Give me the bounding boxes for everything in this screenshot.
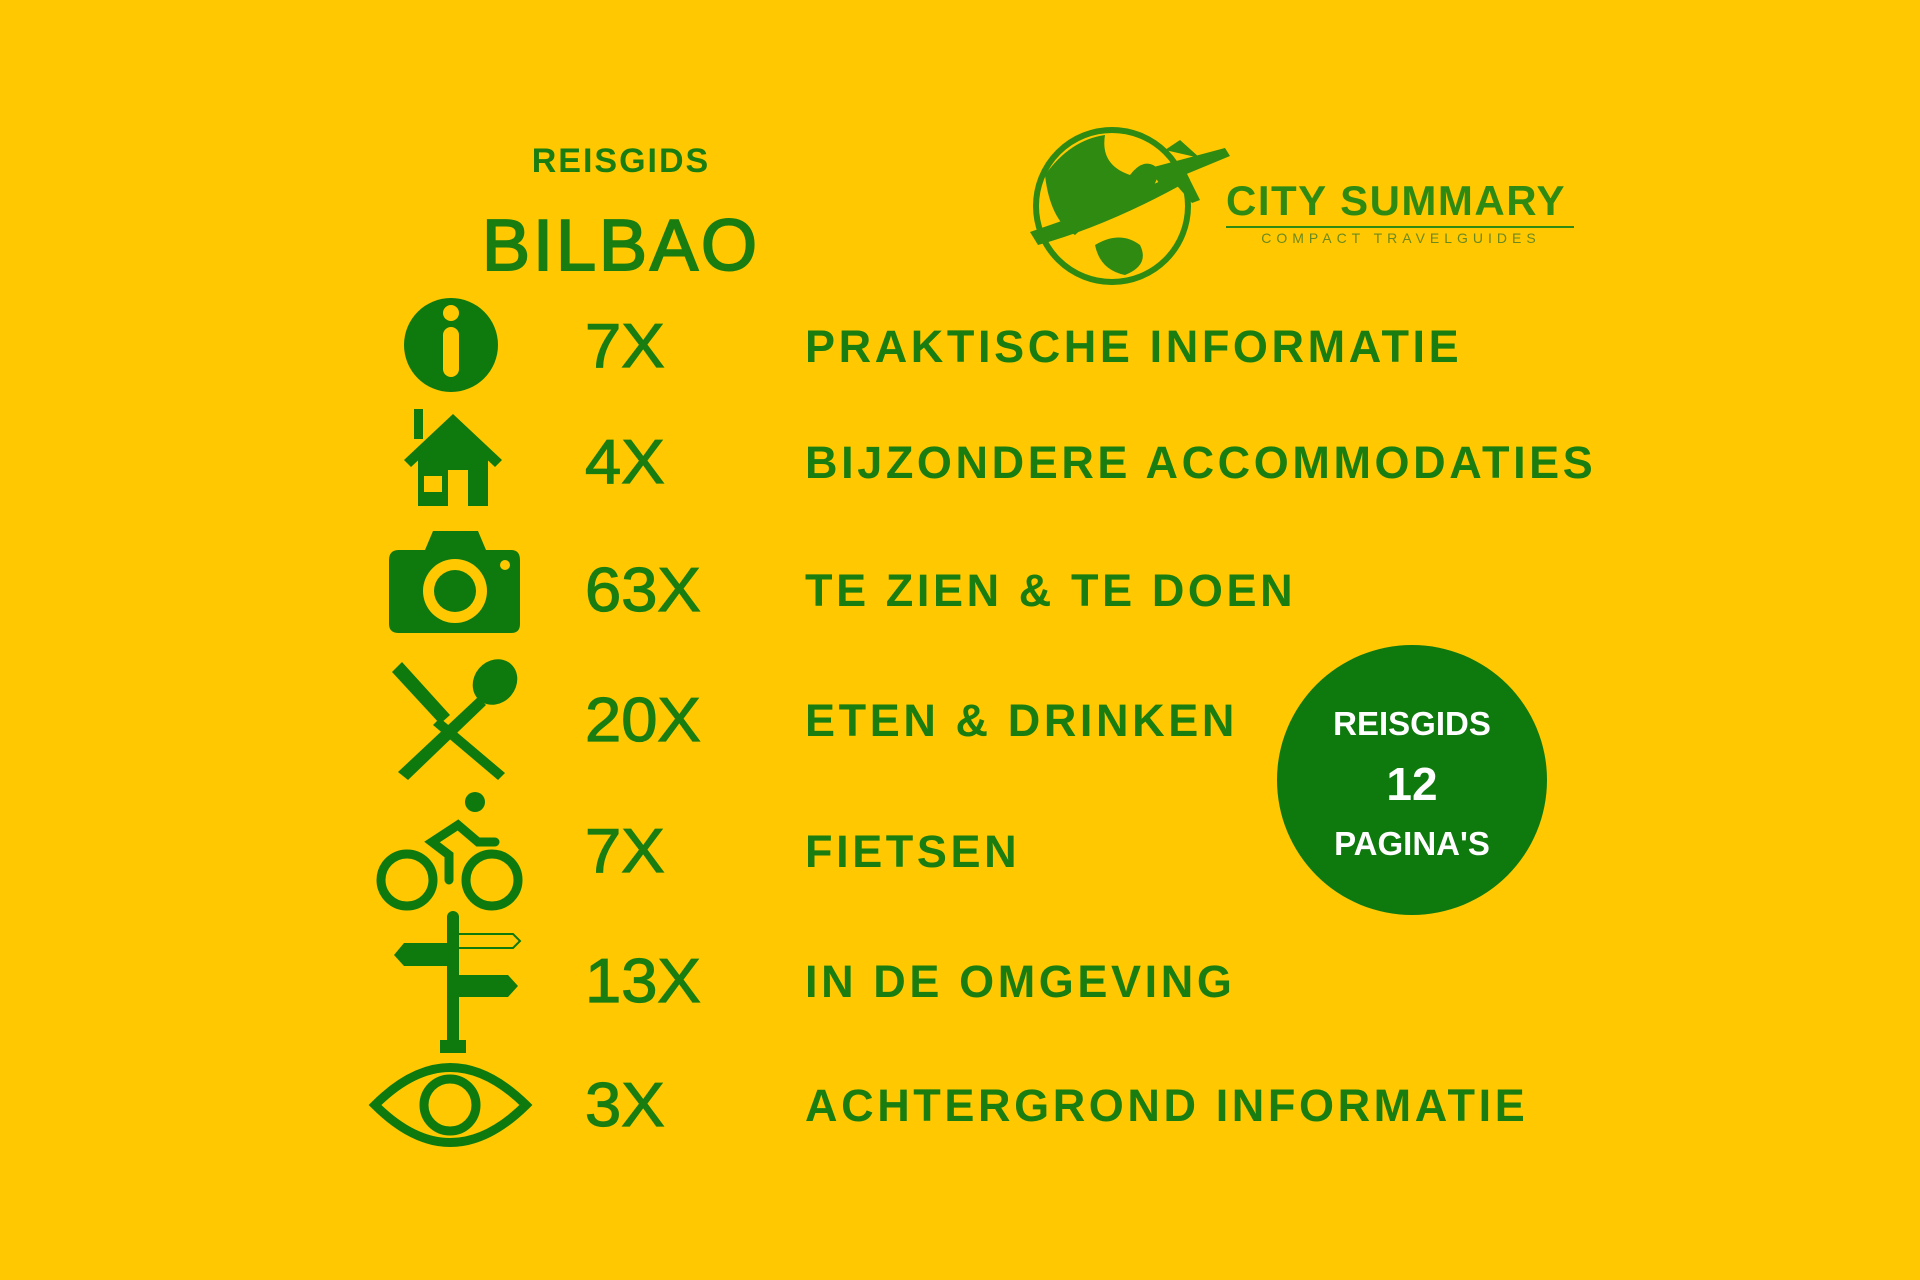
text: FIETSEN	[805, 826, 1020, 877]
text: ACHTERGROND INFORMATIE	[805, 1080, 1528, 1131]
badge: 12 pages: PAGINA'S	[1334, 825, 1490, 862]
icon: house	[404, 409, 502, 506]
row 5: 7X	[585, 817, 665, 886]
logo text	[1226, 177, 1574, 246]
logo text: CITY SUMMARY	[1226, 177, 1566, 224]
row 1: 7X	[585, 312, 665, 381]
row 6: 13X	[585, 947, 701, 1016]
row 4: 20X	[585, 686, 701, 755]
heading: bilbao: BILBAO	[482, 206, 760, 286]
row 3: 63X	[585, 556, 701, 625]
text: TE ZIEN & TE DOEN	[805, 565, 1296, 616]
icon: fork and spoon	[392, 650, 527, 780]
icon: signpost	[394, 911, 520, 1053]
text: PRAKTISCHE INFORMATIE	[805, 321, 1462, 372]
icon: bike	[381, 792, 518, 906]
icon: info	[404, 298, 498, 392]
logo: globe with plane	[1030, 130, 1230, 282]
row 2: 4X	[585, 428, 665, 497]
text: IN DE OMGEVING	[805, 956, 1235, 1007]
badge: 12 pages: REISGIDS	[1333, 705, 1491, 742]
row 7: 3X	[585, 1071, 665, 1140]
text: ETEN & DRINKEN	[805, 695, 1238, 746]
icon: camera	[389, 531, 520, 633]
icon: eye	[375, 1068, 526, 1142]
heading: reisgids: REISGIDS	[532, 142, 710, 180]
text: BIJZONDERE ACCOMMODATIES	[805, 437, 1596, 488]
badge: 12 pages: 12	[1386, 758, 1438, 810]
logo text: COMPACT TRAVELGUIDES	[1261, 230, 1541, 246]
badge: 12 pages	[1277, 645, 1547, 915]
